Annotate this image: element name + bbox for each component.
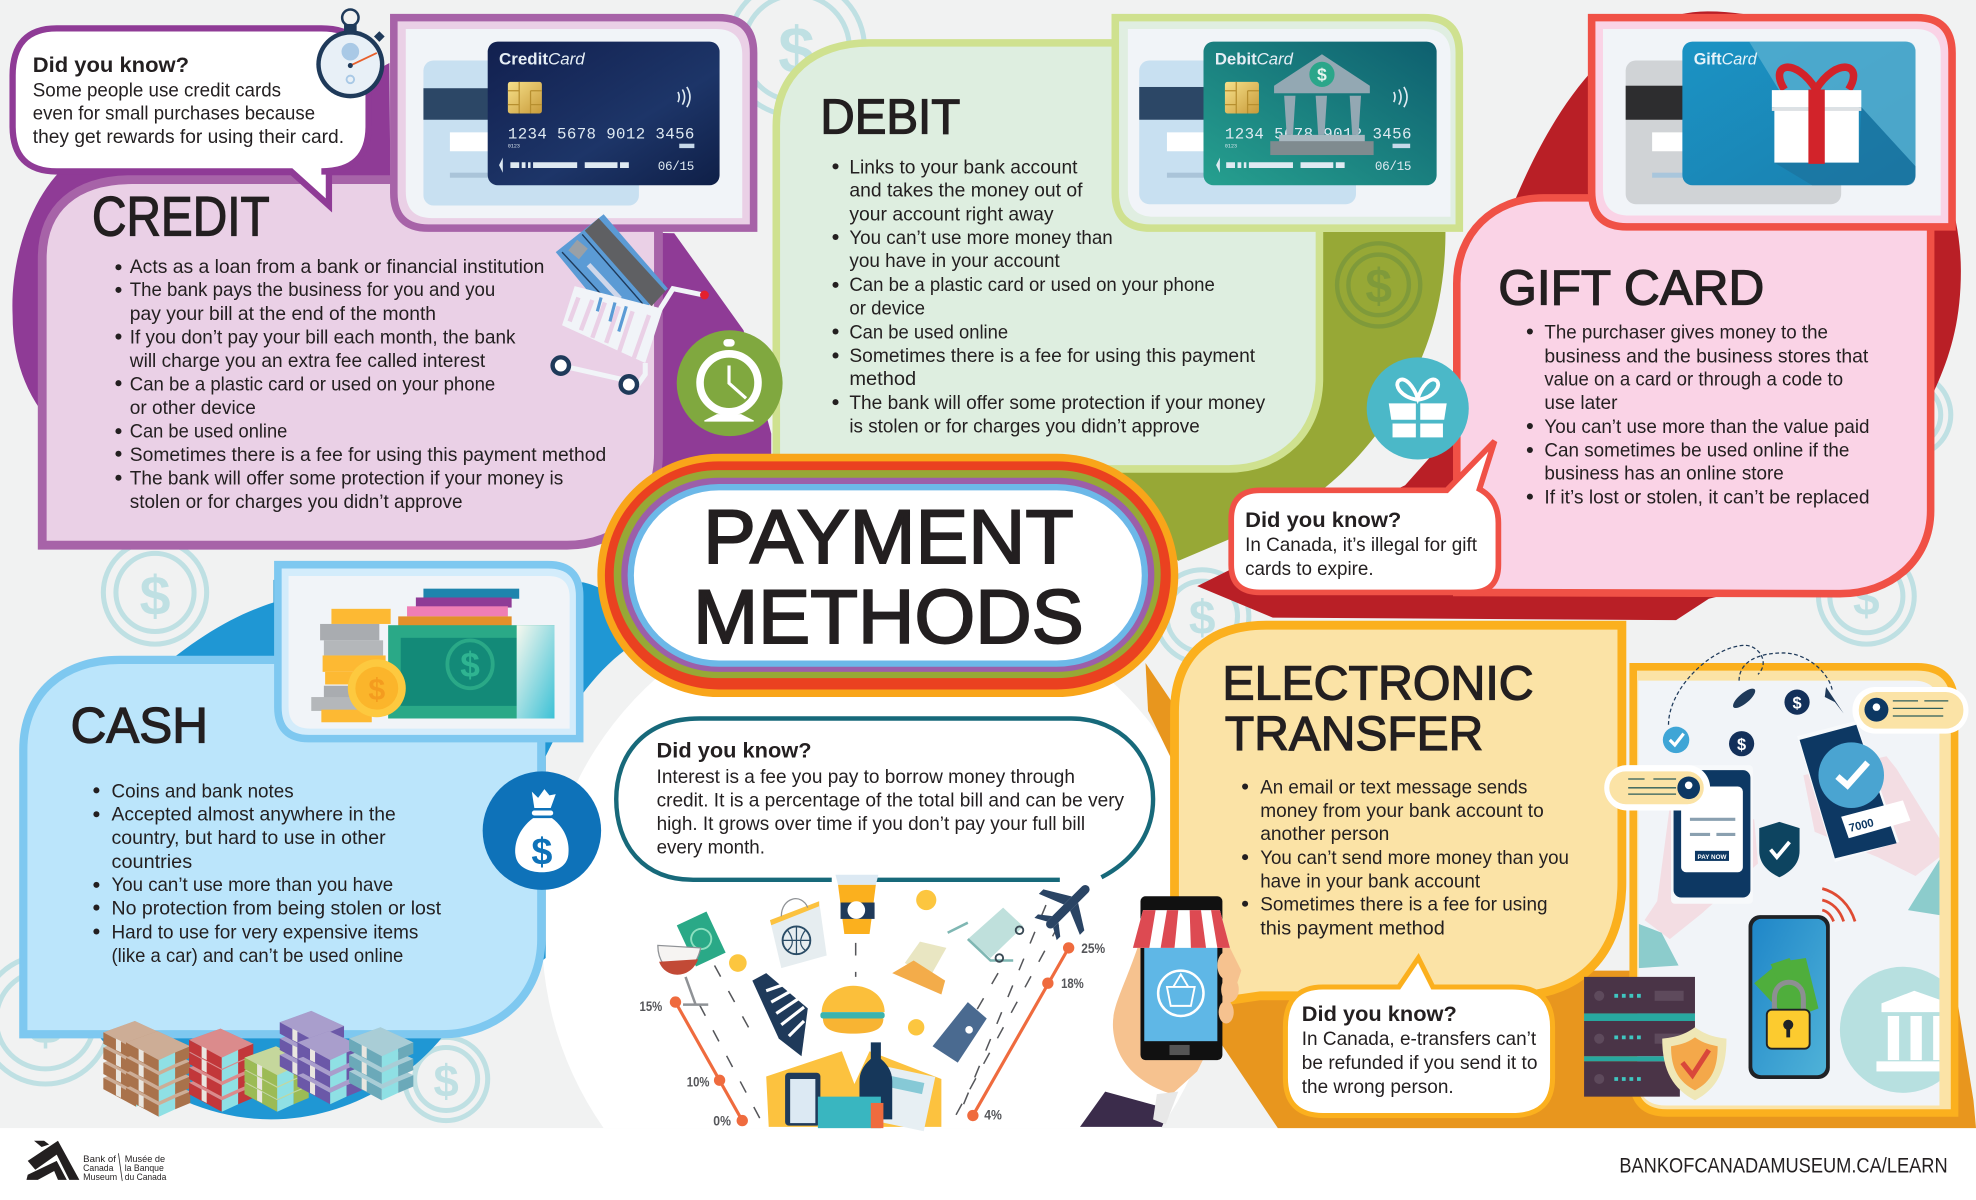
debit bullet list: The bank will offer some protection if your money [849,393,1266,414]
title text: PAYMENT [703,496,1074,580]
debit bullet list: method [849,369,916,390]
gift panel body [1457,198,1931,594]
transfer bullet list: this payment method [1260,919,1445,940]
logo: bank of canada museum: Bank of [83,1154,116,1164]
transfer bullet list: another person [1260,824,1389,845]
gift bullet list: value on a card or through a code to [1544,370,1843,391]
icon: dashed transfer arcs [1669,645,1832,725]
gift bullet list [1527,322,1870,509]
icon: diamond and gold bars [892,942,946,995]
title text [693,496,1084,660]
dashed trajectories [699,905,1059,1126]
credit bullet list: The bank will offer some protection if your money is [130,469,563,490]
cash bullet list: No protection from being stolen or lost [112,898,442,919]
icon: money bag badge [483,771,601,890]
icon: right hand and phone: 7000 [1848,817,1875,835]
icon: gift box [1772,67,1861,164]
back of card [1626,61,1841,204]
cash panel body [23,660,541,1034]
credit bullet list: stolen or for charges you didn’t approve [130,492,462,513]
transfer did-you-know bubble: Did you know? [1302,1002,1457,1026]
centre did-you-know bubble [616,718,1153,880]
debit card front: 0123 [1225,143,1237,149]
dark orange backing shapes [1146,663,1976,1128]
icon: server rack [1584,977,1695,1097]
background dollar coins: $ [1853,573,1880,626]
background dollar coins: $ [1189,592,1216,645]
debit bullet list: You can’t use more money than [849,228,1113,249]
icon: wallet [933,1002,987,1063]
icon: olive dollar coin [1337,243,1420,326]
gift bullet list: Can sometimes be used online if the [1544,440,1849,461]
transfer bullet list [1242,777,1569,940]
debit bullet list: you have in your account [849,251,1061,272]
icon: alarm clock badge [677,330,783,436]
credit bullet list: The bank pays the business for you and you [130,280,495,301]
icon: coin stack: $ [368,674,385,707]
purple backing blob [12,63,771,511]
icon: banknote [677,911,726,966]
debit card front: 1234 5678 9012 3456 [1225,126,1411,144]
debit heading: DEBIT [820,91,960,145]
gift did-you-know bubble: Did you know? [1245,508,1401,532]
gift did-you-know bubble [1231,441,1498,592]
credit did-you-know bubble: Some people use credit cards [33,80,281,101]
gift bullet list: use later [1544,393,1618,414]
background dollar coins: $ [433,1056,459,1107]
icon: left hand and phone: PAY NOW [1698,854,1726,861]
credit heading: CREDIT [92,186,270,248]
transfer heading: ELECTRONIC [1222,658,1534,711]
debit bullet list: Can be a plastic card or used on your phone [849,275,1215,296]
icon: left hand and phone [1639,765,1758,968]
icon: transfer arrow head [1825,687,1844,713]
cash bullet list: (like a car) and can’t be used online [112,946,403,967]
icon: shield [1759,822,1800,877]
red backing blob [1197,11,1961,620]
transfer panel body [1175,625,1622,1008]
left rate line: 0% [713,1113,731,1129]
panel: debit [776,18,1459,469]
debit bullet list: Sometimes there is a fee for using this payment [849,346,1256,367]
credit bullet list: pay your bill at the end of the month [130,304,436,325]
right rate line: 18% [1061,975,1084,991]
transfer bullet list: An email or text message sends [1260,777,1527,798]
transfer did-you-know bubble [1285,958,1553,1116]
icon: hand holding phone shop [1080,896,1241,1127]
cash bullet list: You can’t use more than you have [112,875,393,896]
olive backing blob [1084,232,1445,561]
logo: bank of canada museum: Musée de [125,1154,165,1164]
icon: olive dollar coin: $ [1365,261,1392,314]
logo: bank of canada museum: la Banque [125,1163,164,1173]
debit bullet list: is stolen or for charges you didn’t approve [849,416,1200,437]
logo: bank of canada museum: Canada [83,1163,114,1173]
credit did-you-know bubble: even for small purchases because [33,104,315,125]
logo: bank of canada museum: Museum [83,1172,117,1182]
transfer heading [1222,658,1534,761]
icon: left chat bubble [1604,765,1710,811]
credit card front: CreditCard [499,49,585,68]
credit bullet list: If you don’t pay your bill each month, the bank [130,327,516,348]
icon: stacked bank notes [388,589,554,718]
icon: phone with lock [1749,915,1830,1079]
left rate line [640,996,748,1129]
icon: cart [948,908,1023,962]
debit card front: 06/15 [1375,160,1411,174]
transfer did-you-know bubble: the wrong person. [1302,1077,1454,1098]
logo: bank of canada museum: du Canada [125,1172,167,1182]
credit card front: 06/15 [658,160,694,174]
icon: airplane [1025,865,1108,949]
icon: burger [820,986,885,1034]
right rate line: 4% [984,1106,1002,1122]
debit bullet list: your account right away [849,205,1054,226]
credit bullet list: will charge you an extra fee called interest [129,351,486,372]
gift bullet list: If it’s lost or stolen, it can’t be replaced [1544,488,1870,509]
gift bullet list: business and the business stores that [1544,346,1869,367]
transfer did-you-know bubble: In Canada, e-transfers can’t [1302,1029,1537,1050]
back of card [1139,61,1356,204]
centre did-you-know bubble: credit. It is a percentage of the total bill and can be very [657,791,1125,812]
gift did-you-know bubble: In Canada, it’s illegal for gift [1245,535,1478,556]
icon: gold coins [729,890,936,1036]
background dollar coins: $ [778,14,815,87]
icon: floating coins and check: $ [1737,736,1746,754]
credit bullet list: Can be used online [130,421,287,442]
icon: shopping bag [770,899,827,968]
left rate line: 15% [640,998,662,1014]
background dollar coins: $ [27,985,64,1058]
cash bullet list [93,781,442,967]
cash bullet list: Coins and bank notes [112,781,294,802]
footer band [0,1128,1976,1200]
gift heading: GIFT CARD [1498,261,1764,315]
transfer heading: TRANSFER [1225,708,1483,761]
credit did-you-know bubble: Did you know? [33,53,189,77]
icon: floating coins and check [1663,686,1810,756]
debit card front: DebitCard [1215,49,1293,68]
credit bullet list [115,257,606,513]
transfer bullet list: have in your bank account [1260,871,1481,892]
white centre circle [542,592,1222,1128]
icon: stacked bank notes: $ [460,646,480,685]
gift image frame [1592,18,1952,227]
blue backing blob [25,580,626,1119]
panel: credit [13,9,754,545]
credit bullet list: Sometimes there is a fee for using this payment method [130,445,606,466]
icon: gift badge [1367,357,1469,459]
icon: orange shield [1662,1027,1726,1100]
transfer did-you-know bubble: be refunded if you send it to [1302,1053,1537,1074]
credit card front: 0123 [508,143,520,149]
interest rate illustration [640,865,1241,1131]
title: payment methods ring badge [597,454,1178,697]
panel: cash [23,565,580,1117]
icon: bank building [1270,54,1374,155]
panel: gift card [1457,18,1952,594]
transfer bullet list: You can’t send more money than you [1260,848,1569,869]
icon: money bag badge: $ [531,832,552,874]
gift bullet list: The purchaser gives money to the [1544,322,1828,343]
icon: stopwatch [316,9,385,98]
icon: coffee cup [836,875,878,934]
gift bullet list: You can’t use more than the value paid [1544,417,1870,438]
credit bullet list: Can be a plastic card or used on your phone [130,374,495,395]
right rate line: 25% [1081,940,1105,956]
icon: wine glass [658,945,708,1005]
gift did-you-know bubble: cards to expire. [1245,559,1374,580]
credit did-you-know bubble [13,28,369,205]
icon: stacks of money [103,1011,413,1117]
right rate line [967,940,1105,1122]
debit card front [1203,42,1437,185]
debit bullet list [832,157,1266,437]
transfer bullet list: money from your bank account to [1260,801,1544,822]
icon: coin stack [311,609,406,722]
logo: bank of canada museum [26,1141,167,1182]
panel: electronic transfer [1175,625,1968,1116]
debit panel body [776,43,1319,469]
centre did-you-know bubble: Interest is a fee you pay to borrow money through [657,767,1075,788]
credit panel body [42,180,658,545]
debit image frame [1115,18,1459,228]
centre did-you-know bubble: high. It grows over time if you don’t pay your full bill [657,814,1085,835]
credit card front: 1234 5678 9012 3456 [508,126,694,144]
cash heading: CASH [71,696,208,753]
debit bullet list: and takes the money out of [849,181,1083,202]
cash bullet list: country, but hard to use in other [112,828,386,849]
debit bullet list: or device [849,298,925,319]
icon: right hand and phone [1797,721,1939,915]
back of card [423,61,639,205]
credit bullet list: or other device [130,398,256,419]
cash bullet list: countries [112,852,192,873]
icon: floating coins and check: $ [1792,694,1802,712]
cash bullet list: Accepted almost anywhere in the [112,805,396,826]
background dollar coins: $ [140,565,171,627]
left rate line: 10% [687,1074,709,1090]
credit bullet list: Acts as a loan from a bank or financial institution [130,257,544,278]
transfer image frame [1584,645,1968,1113]
icon: shopping cart with card [553,214,709,393]
credit did-you-know bubble: they get rewards for using their card. [33,127,344,148]
icon: signal arcs [1822,889,1855,921]
gift card front: GiftCard [1694,49,1757,68]
debit bullet list: Can be used online [849,322,1008,343]
icon: right chat bubble [1852,687,1968,734]
icon: bank building: $ [1317,65,1327,85]
icon: open box with goods [766,1042,941,1131]
cash image frame [278,565,580,739]
cash bullet list: Hard to use for very expensive items [112,922,418,943]
gift card front [1682,42,1916,185]
credit image frame [394,18,754,228]
credit card front [488,42,720,185]
icon: bank circle [1840,966,1940,1093]
icon: striped tie [752,973,808,1056]
centre did-you-know bubble: every month. [657,837,765,858]
title text: METHODS [693,576,1084,660]
debit bullet list: Links to your bank account [849,157,1078,178]
gift bullet list: business has an online store [1544,464,1784,485]
centre did-you-know bubble: Did you know? [657,739,812,763]
transfer bullet list: Sometimes there is a fee for using [1260,895,1548,916]
